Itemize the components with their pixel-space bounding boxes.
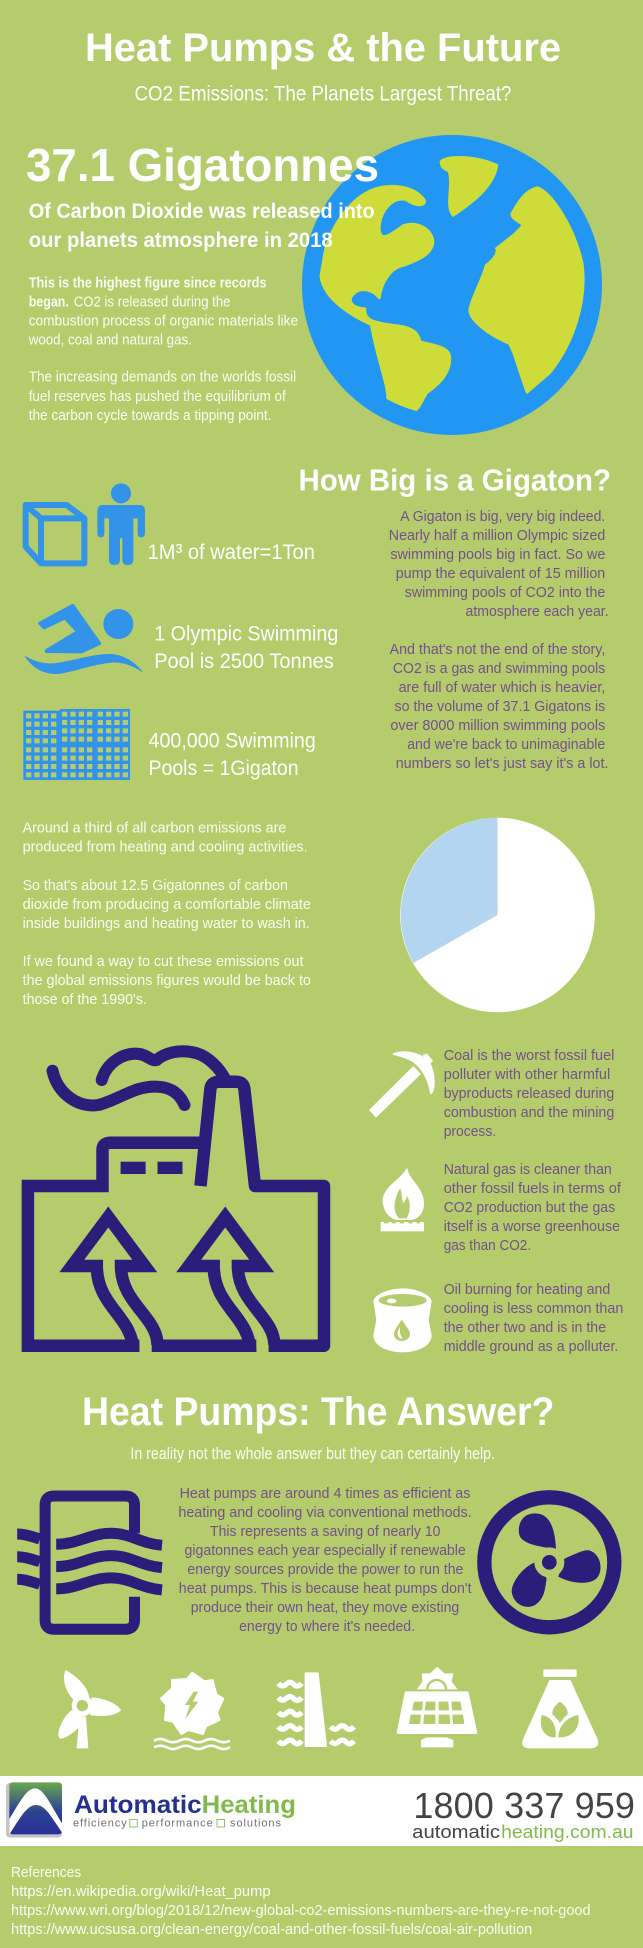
- heading: How Big is a Gigaton: How Big is a Gigaton?: [298, 463, 611, 498]
- website: automatic: [412, 1822, 500, 1842]
- text block: gigaton explanation: are full of water which is heavier,: [399, 679, 605, 696]
- text block: intro: CO2 is released during the: [74, 294, 230, 311]
- text block: coal: byproducts released during: [444, 1085, 614, 1102]
- text block: coal: Coal is the worst fossil fuel: [444, 1047, 614, 1064]
- text block: gigaton explanation: Nearly half a million Olympic sized: [389, 527, 605, 544]
- references: [11, 1864, 590, 1938]
- text block: natural gas: CO2 production but the gas: [444, 1199, 615, 1216]
- text block: heating and cooling share: So that's about 12.5 Gigatonnes of carbon: [23, 877, 288, 894]
- text block: natural gas: gas than CO2.: [444, 1237, 531, 1254]
- icon: dam: [278, 1673, 354, 1746]
- icon: water wheel: [154, 1673, 230, 1749]
- text block: gigaton explanation: pump the equivalent of 15 million: [396, 565, 605, 582]
- text block: gigaton explanation: swimming pools big in fact. So we: [390, 546, 605, 563]
- icon: gas flame: [381, 1167, 424, 1231]
- text block: heating and cooling share: Around a third of all carbon emissions are: [23, 820, 286, 837]
- text block: gigaton explanation: numbers so let's just say it's a lot.: [396, 755, 608, 772]
- sub-headline: our planets atmosphere in 2018: [29, 228, 333, 252]
- text block: heating and cooling share: If we found a way to cut these emissions out: [23, 953, 304, 970]
- text block: intro: fuel reserves has pushed the equilibrium of: [29, 388, 287, 405]
- text block: oil: [444, 1281, 623, 1355]
- text block: heat pumps: [178, 1485, 472, 1635]
- icon: fan: [484, 1497, 614, 1627]
- headline: 37.1 Gigatonnes: 37.1 Gigatonnes: [26, 139, 379, 191]
- icon: pool grid: [23, 709, 130, 780]
- subtitle: CO2 Emissions: The Planets Largest Threat?: [134, 83, 512, 106]
- text block: oil: Oil burning for heating and: [444, 1281, 610, 1298]
- icon: heat exchanger: [17, 1496, 162, 1629]
- logo wordmark: solutions: [230, 1818, 282, 1830]
- label: swimming pools: Pools = 1Gigaton: [148, 756, 299, 780]
- icon: pickaxe: [369, 1052, 434, 1118]
- text block: heat pumps: This represents a saving of nearly 10: [210, 1523, 440, 1540]
- icon: wind turbine: [58, 1670, 121, 1748]
- text block: oil: cooling is less common than: [444, 1300, 623, 1317]
- text block: heating and cooling share: the global emissions figures would be back to: [23, 972, 311, 989]
- icon: biofuel flask: [522, 1669, 598, 1748]
- icon: oil barrel: [373, 1288, 432, 1352]
- text block: gigaton explanation: CO2 is a gas and swimming pools: [393, 660, 605, 677]
- text block: heating and cooling share: those of the 1990's.: [23, 991, 147, 1008]
- text block: heating and cooling share: produced from heating and cooling activities.: [23, 839, 308, 856]
- phone number: 1800 337 959: [413, 1785, 635, 1826]
- text block: natural gas: [444, 1161, 622, 1254]
- text block: heat pumps: gigatonnes each year especially if renewable: [184, 1542, 466, 1559]
- text block: gigaton explanation: and we're back to unimaginable: [407, 736, 605, 753]
- website: [412, 1822, 634, 1842]
- footer band: [0, 1776, 643, 1846]
- text block: heating and cooling share: inside buildings and heating water to wash in.: [23, 915, 310, 932]
- text block: gigaton explanation: swimming pools of CO2 into the: [405, 584, 605, 601]
- sub-headline: Of Carbon Dioxide was released into: [29, 199, 375, 223]
- text block: heating and cooling share: dioxide from producing a comfortable climate: [23, 896, 311, 913]
- references: References: [11, 1864, 81, 1881]
- label: swimming pools: [148, 729, 316, 780]
- icon: solar panel: [398, 1667, 476, 1747]
- text block: heat pumps: produce their own heat, they move existing: [191, 1599, 459, 1616]
- logo wordmark: efficiency: [73, 1818, 127, 1830]
- text block: gigaton explanation: atmosphere each year.: [466, 603, 609, 620]
- logo wordmark: Automatic: [74, 1791, 202, 1819]
- text block: coal: combustion and the mining: [444, 1104, 614, 1121]
- text block: coal: [444, 1047, 614, 1140]
- text block: intro: The increasing demands on the worlds fossil: [29, 369, 296, 386]
- text block: gigaton explanation: so the volume of 37.1 Gigatons is: [394, 698, 605, 715]
- text block: gigaton explanation: A Gigaton is big, very big indeed.: [400, 508, 605, 525]
- label: olympic pool: [154, 622, 338, 673]
- label: swimming pools: 400,000 Swimming: [148, 729, 316, 753]
- text block: oil: middle ground as a polluter.: [444, 1338, 618, 1355]
- sub-headline: [29, 199, 375, 252]
- text block: intro: combustion process of organic materials like: [29, 313, 298, 330]
- references: https://www.wri.org/blog/2018/12/new-global-co2-emissions-numbers-are-they-re-not-good: [11, 1902, 590, 1919]
- text block: heating and cooling share: [23, 820, 311, 1008]
- label: olympic pool: Pool is 2500 Tonnes: [154, 649, 334, 673]
- text block: gigaton explanation: over 8000 million swimming pools: [390, 717, 605, 734]
- text block: coal: polluter with other harmful: [444, 1066, 610, 1083]
- text block: gigaton explanation: [389, 508, 609, 772]
- text block: gigaton explanation: And that's not the end of the story,: [390, 641, 605, 658]
- text block: oil: the other two and is in the: [444, 1319, 606, 1336]
- label: water: 1M³ of water=1Ton: [148, 540, 315, 564]
- text block: natural gas: itself is a worse greenhouse: [444, 1218, 620, 1235]
- logo wordmark: Heating: [202, 1791, 296, 1819]
- text block: heat pumps: heating and cooling via conventional methods.: [178, 1504, 472, 1521]
- icon: globe: [302, 135, 602, 435]
- text block: heat pumps: heat pumps. This is because heat pumps don't: [179, 1580, 472, 1597]
- logo wordmark: performance: [142, 1818, 213, 1830]
- logo wordmark: [73, 1791, 296, 1830]
- text block: heat pumps: energy to where it's needed.: [239, 1618, 415, 1635]
- text block: heat pumps: energy sources provide the power to run the: [187, 1561, 463, 1578]
- text block: intro: [28, 274, 298, 424]
- text block: intro: the carbon cycle towards a tipping point.: [29, 407, 272, 424]
- website: heating.com.au: [501, 1822, 634, 1842]
- text block: intro: wood, coal and natural gas.: [28, 332, 192, 349]
- text block: intro: This is the highest figure since records: [29, 274, 267, 291]
- subheading: In reality not the whole answer but they can certainly help.: [130, 1444, 495, 1463]
- heading: Heat Pumps The Answer: Heat Pumps: The Answer?: [82, 1390, 554, 1434]
- text block: intro: began.: [29, 294, 69, 311]
- text block: coal: process.: [444, 1123, 496, 1140]
- icon: factory with heat arrows: [28, 1051, 324, 1352]
- icon: cube and person: [26, 483, 145, 565]
- references: https://en.wikipedia.org/wiki/Heat_pump: [11, 1883, 271, 1900]
- text block: heat pumps: Heat pumps are around 4 times as efficient as: [180, 1485, 470, 1502]
- label: olympic pool: 1 Olympic Swimming: [154, 622, 338, 646]
- title: Heat Pumps & the Future: [85, 26, 561, 70]
- text block: natural gas: Natural gas is cleaner than: [444, 1161, 612, 1178]
- references: https://www.ucsusa.org/clean-energy/coal-and-other-fossil-fuels/coal-air-pollution: [11, 1921, 532, 1938]
- logo: Automatic Heating mark: [6, 1782, 62, 1838]
- text block: natural gas: other fossil fuels in terms of: [444, 1180, 622, 1197]
- pie chart: one third of emissions: [400, 818, 595, 1012]
- icon: swimmer: [24, 606, 143, 674]
